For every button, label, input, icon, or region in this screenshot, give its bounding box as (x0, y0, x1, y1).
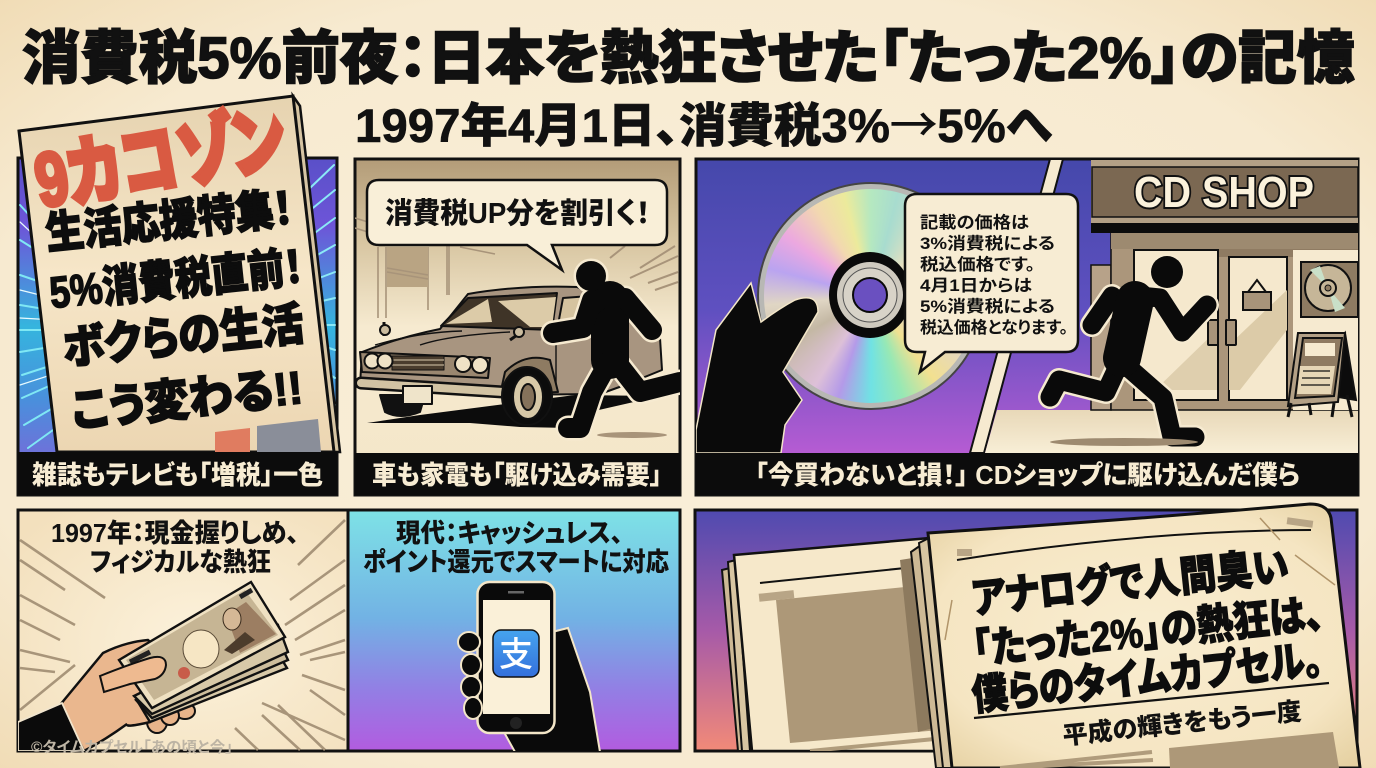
notice bubble (905, 194, 1078, 372)
magazine back pages (293, 96, 340, 452)
heading modern: 現代：キャッシュレス、 (396, 518, 623, 548)
running man (1050, 254, 1207, 437)
A-frame sign (1288, 333, 1356, 417)
hand (60, 638, 151, 750)
cover masthead: 9カコゾン (29, 97, 292, 224)
cover headline: アナログで人間臭い (970, 543, 1291, 622)
diagonal divider (970, 159, 1063, 453)
bill details (126, 590, 278, 700)
shop facade (1091, 233, 1358, 410)
magazine cover (19, 96, 334, 452)
shop sign (1091, 159, 1358, 233)
panel: time capsule magazines (695, 504, 1360, 768)
panel: CD shop (696, 159, 1358, 495)
caption: 「今買わないと損！」 CDショップに駆け込んだ僕ら (755, 460, 1300, 490)
sign text: CD SHOP (1134, 168, 1314, 217)
phone (478, 582, 554, 733)
bubble text: 5%消費税による (920, 297, 1055, 316)
sub heading: ポイント還元でスマートに対応 (363, 547, 669, 577)
CD disc (757, 182, 985, 410)
man shadow (597, 432, 667, 438)
CD hub (829, 252, 911, 338)
poster CD (1301, 262, 1358, 317)
title: 消費税5%前夜：日本を熱狂させた「たった2%」の記憶 (22, 26, 1355, 91)
panel: magazine (18, 96, 340, 495)
hand behind phone (500, 628, 600, 752)
cover headline: 僕らのタイムカプセル。 (970, 636, 1325, 719)
sub heading: フィジカルな熱狂 (90, 547, 271, 577)
copyright: ©タイムカプセル「あの頃と今」 (31, 738, 233, 756)
cover headline: ボクらの生活 (60, 297, 306, 375)
speed lines (610, 246, 678, 290)
speed lines (20, 165, 335, 448)
bubble text: 税込価格となります。 (920, 318, 1068, 337)
cover headline: 生活応援特集！ (43, 184, 295, 259)
caption: 雑誌もテレビも「増税」一色 (32, 460, 323, 490)
car (360, 287, 662, 425)
speed lines (20, 520, 345, 750)
speaker (508, 591, 524, 594)
cover photo and lines (1000, 732, 1339, 768)
man shadow (1050, 438, 1198, 446)
cover rules and tags (945, 517, 1335, 718)
cover headline (970, 543, 1326, 719)
bubble text: 税込価格です。 (920, 255, 1035, 274)
cover headline: 5%消費税直前！ (47, 243, 305, 318)
banknotes (119, 582, 288, 722)
speech bubble (367, 180, 667, 270)
sleeve (18, 703, 84, 751)
cover blocks (215, 419, 321, 452)
bubble text: 3%消費税による (920, 234, 1055, 253)
fingers (458, 632, 482, 719)
caption: 車も家電も「駆け込み需要」 (372, 460, 662, 490)
app icon (493, 630, 539, 677)
back magazine (722, 538, 950, 751)
bubble text: 記載の価格は (920, 213, 1029, 232)
fingers behind (147, 703, 195, 733)
running man (553, 260, 680, 428)
bubble text: 4月1日からは (920, 276, 1032, 295)
front magazine cover (928, 504, 1360, 768)
bubble text (920, 213, 1068, 337)
caption bar (696, 453, 1358, 495)
cover subtitle: 平成の輝きをもう一度 (1061, 697, 1303, 750)
bubble text: 消費税UP分を割引く！ (385, 197, 650, 230)
heading 1997: 1997年：現金握りしめ、 (51, 518, 299, 548)
caption bar (18, 452, 337, 495)
panel: modern cashless (348, 510, 680, 752)
caption bar (355, 453, 680, 495)
cover headline: 「たった2%」の熱狂は、 (971, 590, 1326, 673)
app icon: 支 (499, 636, 533, 674)
cover headline: こう変わる!! (69, 361, 305, 437)
front magazine pages (911, 545, 945, 768)
hand silhouette (696, 283, 818, 453)
cover headline (43, 184, 306, 437)
background window (355, 218, 495, 318)
panel: car rush (355, 159, 680, 495)
screen (483, 600, 550, 714)
floor (985, 410, 1358, 453)
panel: 1997 cash (18, 510, 348, 756)
subtitle: 1997年4月1日、消費税3%→5%へ (355, 87, 1052, 156)
car shadow (367, 395, 660, 428)
thumb (100, 657, 166, 692)
home button (510, 717, 522, 729)
